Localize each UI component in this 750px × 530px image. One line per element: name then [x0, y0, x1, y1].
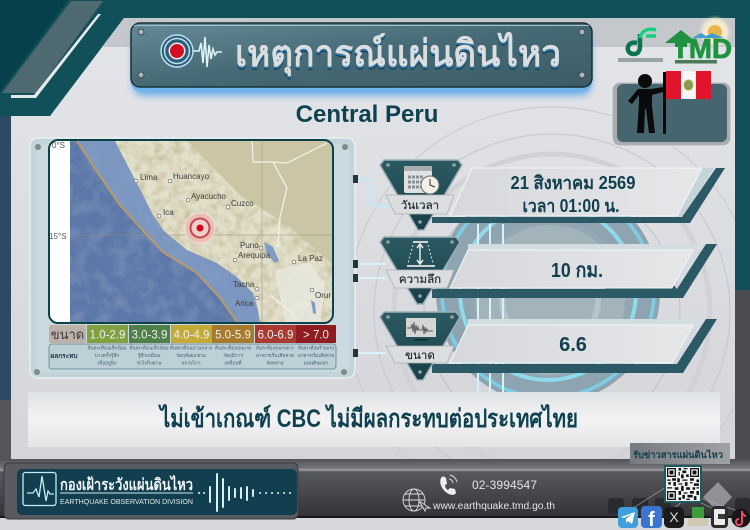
magnitude legend: 1.0-2.9 — [90, 330, 125, 342]
connectors from map panel to info rows — [353, 175, 393, 357]
background concentric rings — [356, 106, 735, 459]
city labels: Orur — [315, 291, 331, 300]
magnitude legend: สั่นสะเทือนปานกลาง — [170, 344, 212, 352]
icon: depth arrow — [407, 242, 435, 266]
magnitude legend: อาคารเริ่มเสียหาย — [298, 352, 334, 359]
magnitude legend: สั่นสะเทือนเล็กน้อย — [129, 344, 169, 352]
panel: division name — [4, 463, 298, 519]
badge: depth icon — [380, 237, 460, 304]
magnitude legend: แผ่นดินแยก — [304, 360, 328, 366]
map: 15°S — [49, 232, 66, 241]
magnitude legend: วัตถุมีการ — [223, 352, 243, 359]
depth value: 10 กม. — [551, 260, 603, 282]
icon: seismograph frame — [23, 472, 56, 506]
banner: CBC statement — [28, 392, 720, 447]
panel: subscribe label — [630, 443, 730, 464]
division Thai name: กองเฝ้าระวังแผ่นดินไหว — [60, 475, 193, 494]
epicentre marker — [185, 213, 215, 243]
magnitude legend: เมื่ออยู่นิ่ง — [98, 360, 116, 366]
magnitude legend: บางครั้งรู้สึก — [95, 351, 119, 359]
contact: phone — [440, 475, 537, 495]
icon: X: X — [669, 509, 679, 525]
icon: seismic target and waveform — [161, 35, 222, 67]
country box with person and flag — [612, 71, 731, 146]
plate boundary — [77, 141, 238, 323]
magnitude legend: 5.0-5.9 — [215, 330, 251, 342]
title text: เหตุการณ์แผ่นดินไหว — [235, 31, 561, 77]
time text: เวลา 01:00 น. — [522, 196, 620, 216]
icon: person holding flag — [628, 72, 666, 134]
magnitude legend: สั่นสะเทือนรุนแรง — [215, 344, 251, 352]
map — [49, 140, 333, 323]
screws — [34, 144, 348, 375]
city labels: Cuzco — [231, 199, 254, 208]
social icons — [618, 506, 750, 530]
info row: magnitude — [380, 312, 717, 380]
lake Titicaca — [264, 242, 279, 263]
city labels: Ayacucho — [191, 192, 227, 201]
magnitude legend: > 7.0 — [303, 330, 329, 342]
panel: map and magnitude legend — [30, 138, 355, 378]
city labels: Huancayo — [173, 172, 210, 181]
map: 0°S — [52, 141, 65, 150]
magnitude legend: สั่นสะเทือนเล็กน้อย — [87, 344, 127, 352]
icon: calendar and clock — [404, 166, 439, 194]
icon: green app — [688, 507, 708, 526]
icon: seismograph monitor — [406, 318, 436, 340]
icon: telegram — [618, 507, 638, 528]
grid lines — [70, 141, 333, 323]
magnitude legend: ผลกระทบ — [50, 353, 78, 360]
screws — [138, 29, 585, 78]
magnitude legend: อาคารเริ่มเสียหาย — [256, 352, 294, 359]
city labels: Lima — [140, 173, 158, 182]
QR code — [630, 465, 738, 511]
city labels: Arequipa — [238, 251, 271, 260]
magnitude value: 6.6 — [559, 334, 587, 356]
heading: location: Central Peru — [296, 101, 438, 128]
borders — [252, 141, 327, 315]
badge: depth icon: ความลึก — [399, 273, 441, 286]
date text: 21 สิงหาคม 2569 — [510, 173, 636, 193]
title plate — [131, 23, 592, 95]
magnitude legend: แกว่งไกว — [181, 360, 201, 366]
contact: website: www.earthquake.tmd.go.th — [432, 501, 555, 512]
magnitude legend: รู้สึกเหมือน — [138, 352, 161, 359]
magnitude legend: วัตถุห้อยแขวน — [176, 352, 207, 359]
magnitude legend: 4.0-4.9 — [174, 330, 209, 342]
info row: date and time — [380, 160, 725, 230]
magnitude legend: สั่นสะเทือนร้ายแรง — [298, 344, 334, 352]
badge: date icon: วันเวลา — [401, 200, 439, 212]
logo: TMD: TMD — [672, 33, 732, 64]
icon: audio waveform — [199, 474, 290, 511]
logo: department mark — [618, 29, 663, 62]
icon: Peru flag — [666, 71, 711, 99]
icon: tiktok — [732, 508, 750, 528]
logo: TMD — [665, 18, 732, 64]
footer bar — [0, 459, 750, 518]
city labels: Arica — [235, 299, 254, 308]
magnitude legend: สั่นสะเทือนรุนแรงมาก — [256, 344, 294, 352]
contact: website — [403, 489, 555, 512]
magnitude legend — [49, 325, 336, 369]
city labels — [134, 172, 331, 308]
icon: document app — [711, 506, 728, 528]
contact: phone: 02-3994547 — [472, 478, 537, 492]
badge: magnitude icon — [380, 312, 460, 380]
magnitude legend: ขนาด — [51, 327, 84, 342]
magnitude legend: เคลื่อนที่ — [224, 360, 242, 366]
magnitude legend: 6.0-6.9 — [258, 330, 293, 342]
badge: magnitude icon: ขนาด — [405, 350, 435, 362]
magnitude legend: รถไฟวิ่งผ่าน — [136, 360, 162, 366]
city labels: Ica — [163, 208, 174, 217]
icon: globe — [403, 489, 430, 511]
info row: depth — [380, 237, 717, 304]
city labels: Puno — [240, 241, 259, 250]
magnitude legend: พังทลาย — [266, 360, 284, 366]
magnitude legend: 3.0-3.9 — [132, 330, 167, 342]
badge: date icon — [380, 160, 462, 230]
city labels: La Paz — [298, 254, 323, 263]
division English name: EARTHQUAKE OBSERVATION DIVISION — [60, 497, 193, 506]
city labels: Tacna — [233, 280, 255, 289]
banner: CBC statement: ไม่เข้าเกณฑ์ CBC ไม่มีผลกระทบต่อประเทศไทย — [158, 403, 578, 433]
icon: phone — [440, 475, 457, 495]
panel: subscribe label: รับข่าวสารแผ่นดินไหว — [633, 449, 723, 461]
